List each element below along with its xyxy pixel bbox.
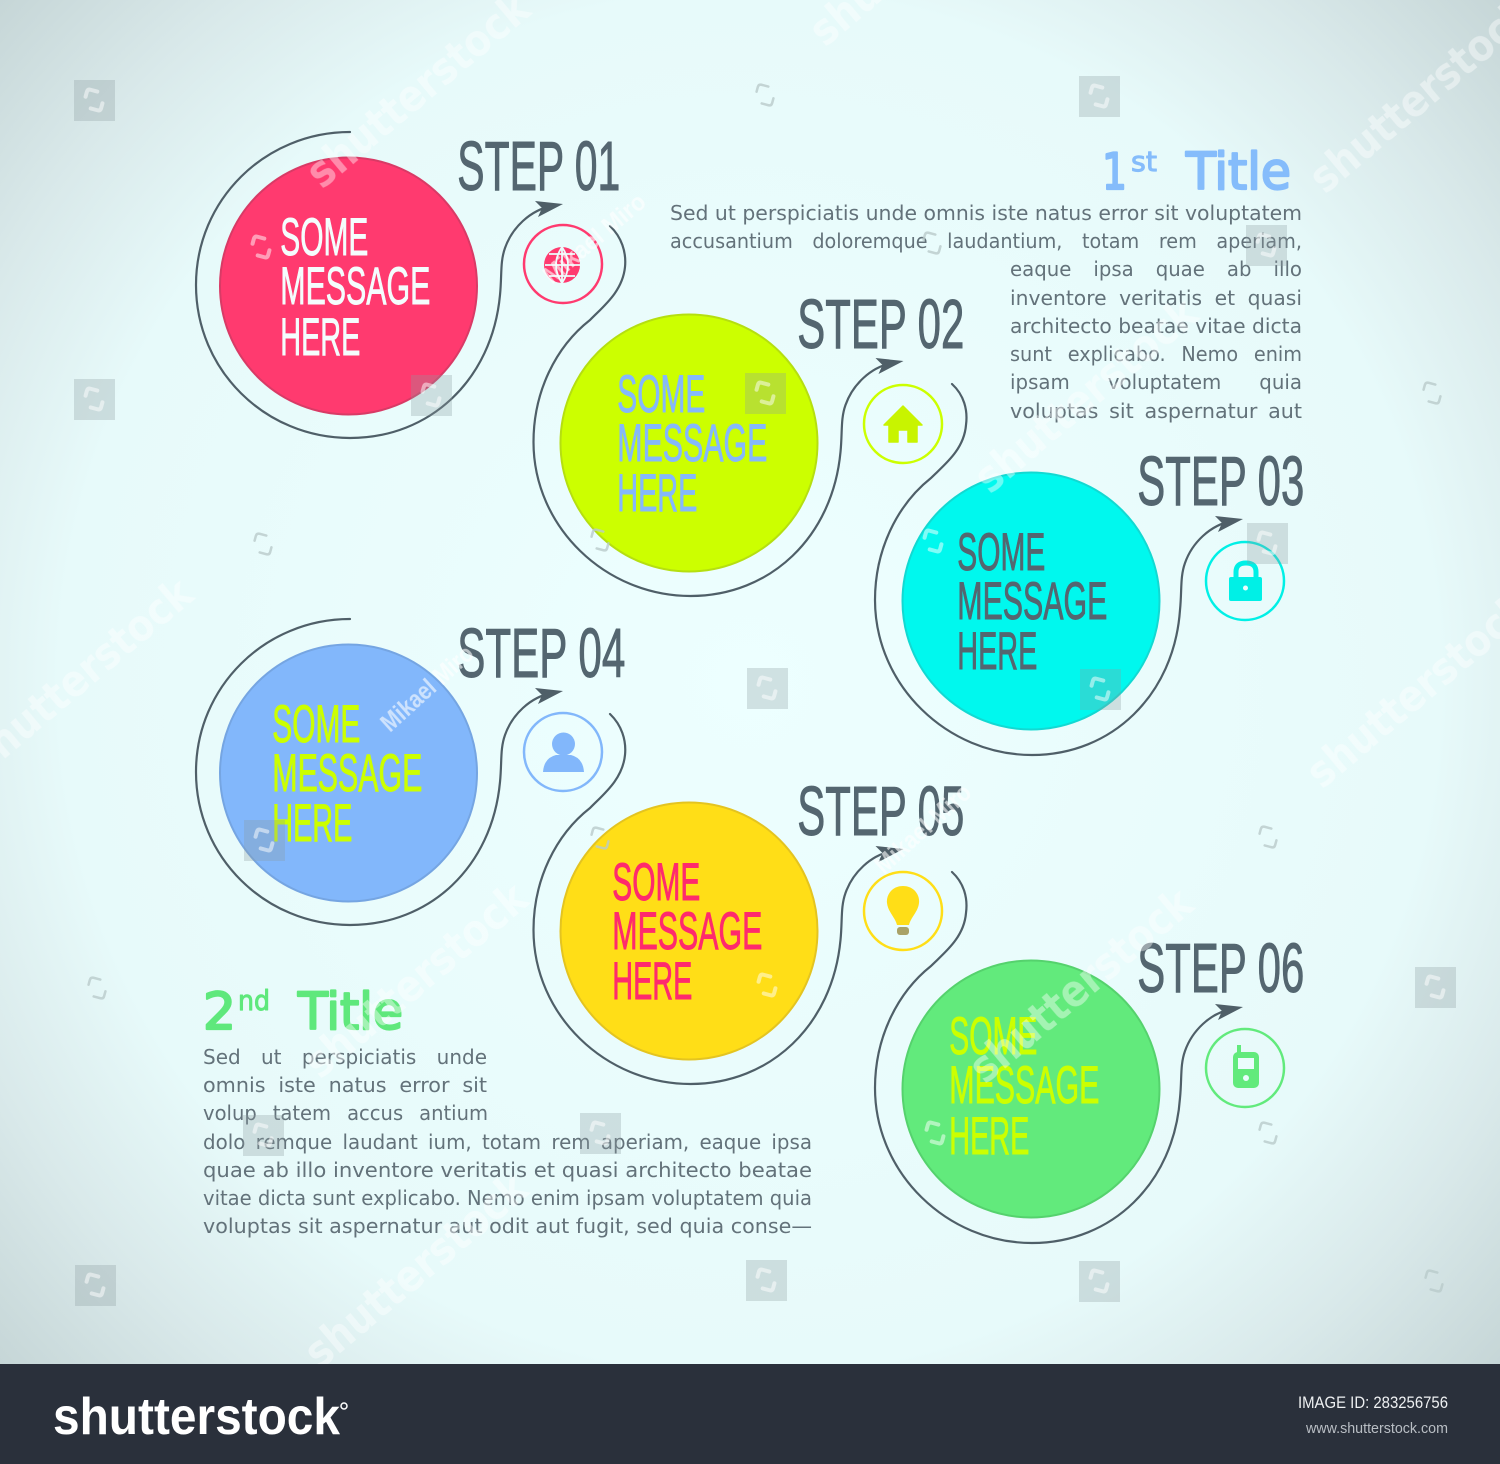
step 02 bbox=[534, 226, 964, 596]
step 06 circle bbox=[902, 960, 1160, 1218]
watermark overlay: Mikael Miro bbox=[375, 640, 479, 737]
icon: house bbox=[864, 385, 942, 463]
icon: light bulb bbox=[864, 872, 942, 950]
footer logo mark bbox=[341, 1403, 347, 1409]
2nd title: 2 bbox=[203, 983, 236, 1042]
step 02 message: MESSAGE bbox=[617, 414, 767, 473]
step 05 label: STEP 05 bbox=[797, 772, 964, 850]
1st text block: voluptas sit aspernatur aut bbox=[1010, 399, 1302, 423]
1st text block bbox=[670, 201, 1302, 423]
1st text block: eaque ipsa quae ab illo bbox=[1010, 257, 1302, 281]
step 03 message: HERE bbox=[957, 622, 1037, 681]
watermark overlay: Mikael Miro bbox=[538, 188, 652, 290]
2nd text block: volup tatem accus antium bbox=[203, 1101, 488, 1125]
step 01 message: MESSAGE bbox=[280, 257, 430, 316]
step 04 message bbox=[272, 695, 422, 853]
footer bar bbox=[0, 1364, 1500, 1464]
2nd title bbox=[203, 983, 403, 1042]
icon: padlock bbox=[1206, 542, 1284, 620]
step 02 circle bbox=[560, 314, 818, 572]
step 02 message: HERE bbox=[617, 464, 697, 523]
step 02 label: STEP 02 bbox=[797, 285, 964, 363]
step 02 spiral arrow bbox=[534, 226, 904, 596]
step 03 message bbox=[957, 523, 1107, 681]
icon: person bbox=[524, 713, 602, 791]
step 01 circle bbox=[220, 158, 477, 414]
step 01 message: SOME bbox=[280, 208, 368, 267]
step 06 label: STEP 06 bbox=[1137, 929, 1304, 1007]
step 04 circle bbox=[220, 644, 477, 902]
1st text block: architecto beatae vitae dicta bbox=[1010, 314, 1302, 338]
step 01 message bbox=[280, 208, 430, 367]
step 05 message: MESSAGE bbox=[612, 902, 762, 961]
2nd text block: omnis iste natus error sit bbox=[203, 1073, 487, 1097]
1st text block: ipsam voluptatem quia bbox=[1010, 370, 1302, 394]
2nd text block: voluptas sit aspernatur aut odit aut fugit, sed quia conse— bbox=[203, 1214, 812, 1238]
icon: globe bbox=[524, 225, 602, 303]
2nd text block: quae ab illo inventore veritatis et quasi architecto beatae bbox=[203, 1158, 812, 1182]
step 01 message: HERE bbox=[280, 308, 360, 367]
watermark overlay: shutterstock bbox=[294, 872, 539, 1088]
2nd title: nd bbox=[238, 984, 270, 1017]
1st title: 1 bbox=[1102, 143, 1127, 201]
watermark overlay: shutterstock bbox=[294, 1162, 539, 1378]
footer logo: shutterstock bbox=[53, 1388, 340, 1446]
1st title bbox=[1102, 143, 1291, 202]
step 02 message: SOME bbox=[617, 365, 705, 424]
step 05 bbox=[534, 714, 964, 1084]
step 06 spiral arrow bbox=[875, 872, 1243, 1243]
step 06 message: MESSAGE bbox=[949, 1056, 1099, 1115]
step 06 message bbox=[949, 1007, 1099, 1166]
watermark overlay: Mikael Miro bbox=[869, 778, 977, 879]
watermark overlay: shutterstock bbox=[959, 877, 1204, 1093]
step 05 spiral arrow bbox=[534, 714, 904, 1084]
step 03 message: SOME bbox=[957, 523, 1045, 582]
footer image id: IMAGE ID: 283256756 bbox=[1298, 1393, 1448, 1412]
icon: mobile phone bbox=[1206, 1029, 1284, 1107]
2nd text block: vitae dicta sunt explicabo. Nemo enim ipsam voluptatem quia bbox=[203, 1186, 812, 1210]
1st title: Title bbox=[1185, 143, 1291, 202]
step 05 circle bbox=[560, 802, 818, 1060]
step 03 spiral arrow bbox=[875, 384, 1243, 755]
step 06 bbox=[875, 872, 1304, 1243]
step 01 spiral arrow bbox=[196, 132, 563, 438]
1st title: st bbox=[1131, 145, 1157, 178]
step 06 message: HERE bbox=[949, 1107, 1029, 1166]
step 05 message: SOME bbox=[612, 853, 700, 912]
1st text block: sunt explicabo. Nemo enim bbox=[1010, 342, 1302, 366]
2nd text block: dolo remque laudant ium, totam rem aperiam, eaque ipsa bbox=[203, 1130, 812, 1154]
step 04 spiral arrow bbox=[196, 619, 563, 925]
step 03 label: STEP 03 bbox=[1137, 442, 1304, 520]
step 01 label: STEP 01 bbox=[457, 127, 620, 205]
step 01 bbox=[196, 127, 620, 438]
1st text block: accusantium doloremque laudantium, totam rem aperiam, bbox=[670, 229, 1302, 253]
2nd text block bbox=[203, 1045, 812, 1238]
step 04 label: STEP 04 bbox=[457, 614, 625, 692]
step 06 message: SOME bbox=[949, 1007, 1037, 1066]
footer website: www.shutterstock.com bbox=[1305, 1420, 1448, 1437]
watermark overlay: shutterstock bbox=[964, 287, 1209, 503]
2nd title: Title bbox=[297, 983, 403, 1042]
step 05 message: HERE bbox=[612, 952, 692, 1011]
step 02 message bbox=[617, 365, 767, 523]
1st text block: Sed ut perspiciatis unde omnis iste natus error sit voluptatem bbox=[670, 201, 1302, 225]
step 04 message: MESSAGE bbox=[272, 744, 422, 803]
step 03 message: MESSAGE bbox=[957, 572, 1107, 631]
step 04 bbox=[196, 614, 625, 925]
step 04 message: SOME bbox=[272, 695, 360, 754]
step 03 circle bbox=[902, 472, 1160, 730]
step 05 message bbox=[612, 853, 762, 1011]
step 03 bbox=[875, 384, 1304, 755]
2nd text block: Sed ut perspiciatis unde bbox=[203, 1045, 487, 1069]
1st text block: inventore veritatis et quasi bbox=[1010, 286, 1302, 310]
step 04 message: HERE bbox=[272, 794, 352, 853]
